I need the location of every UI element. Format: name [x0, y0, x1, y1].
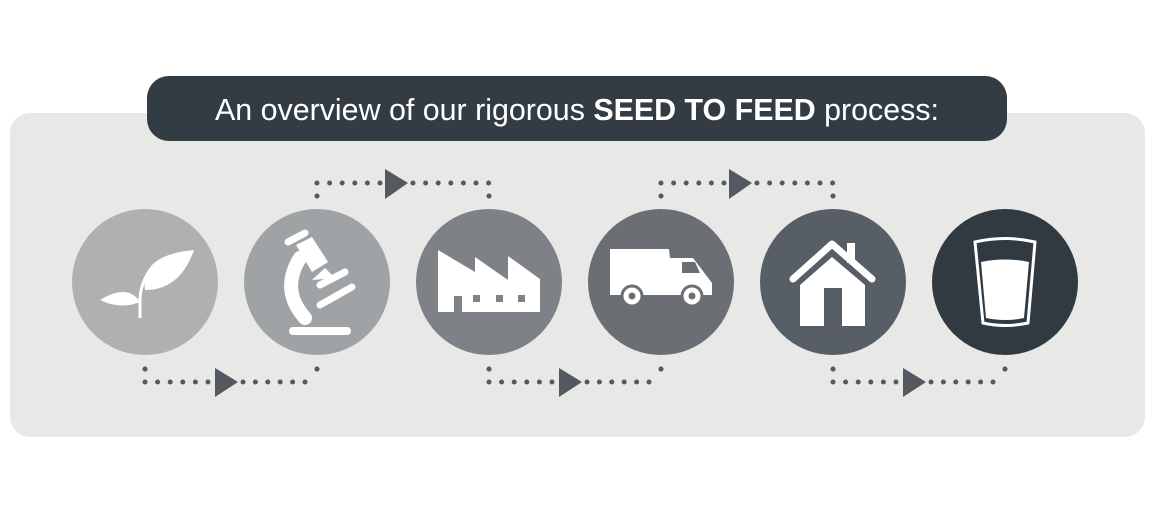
- icon: glass of milk: [932, 209, 1078, 355]
- arrow: truck to home (top): [661, 169, 833, 199]
- icon: factory: [416, 209, 562, 355]
- icon: microscope: [244, 209, 390, 355]
- background panel: [10, 113, 1145, 437]
- arrow: factory to truck (bottom): [489, 368, 661, 397]
- arrow: lab to factory (top): [317, 169, 489, 199]
- arrow: seed to lab (bottom): [145, 368, 317, 397]
- icon: truck: [588, 209, 734, 355]
- title bar: [147, 76, 1007, 141]
- title: An overview of our rigorous SEED TO FEED process:: [215, 92, 939, 127]
- arrow: home to glass (bottom): [833, 368, 1005, 397]
- icon: plant: [72, 209, 218, 355]
- icon: house: [760, 209, 906, 355]
